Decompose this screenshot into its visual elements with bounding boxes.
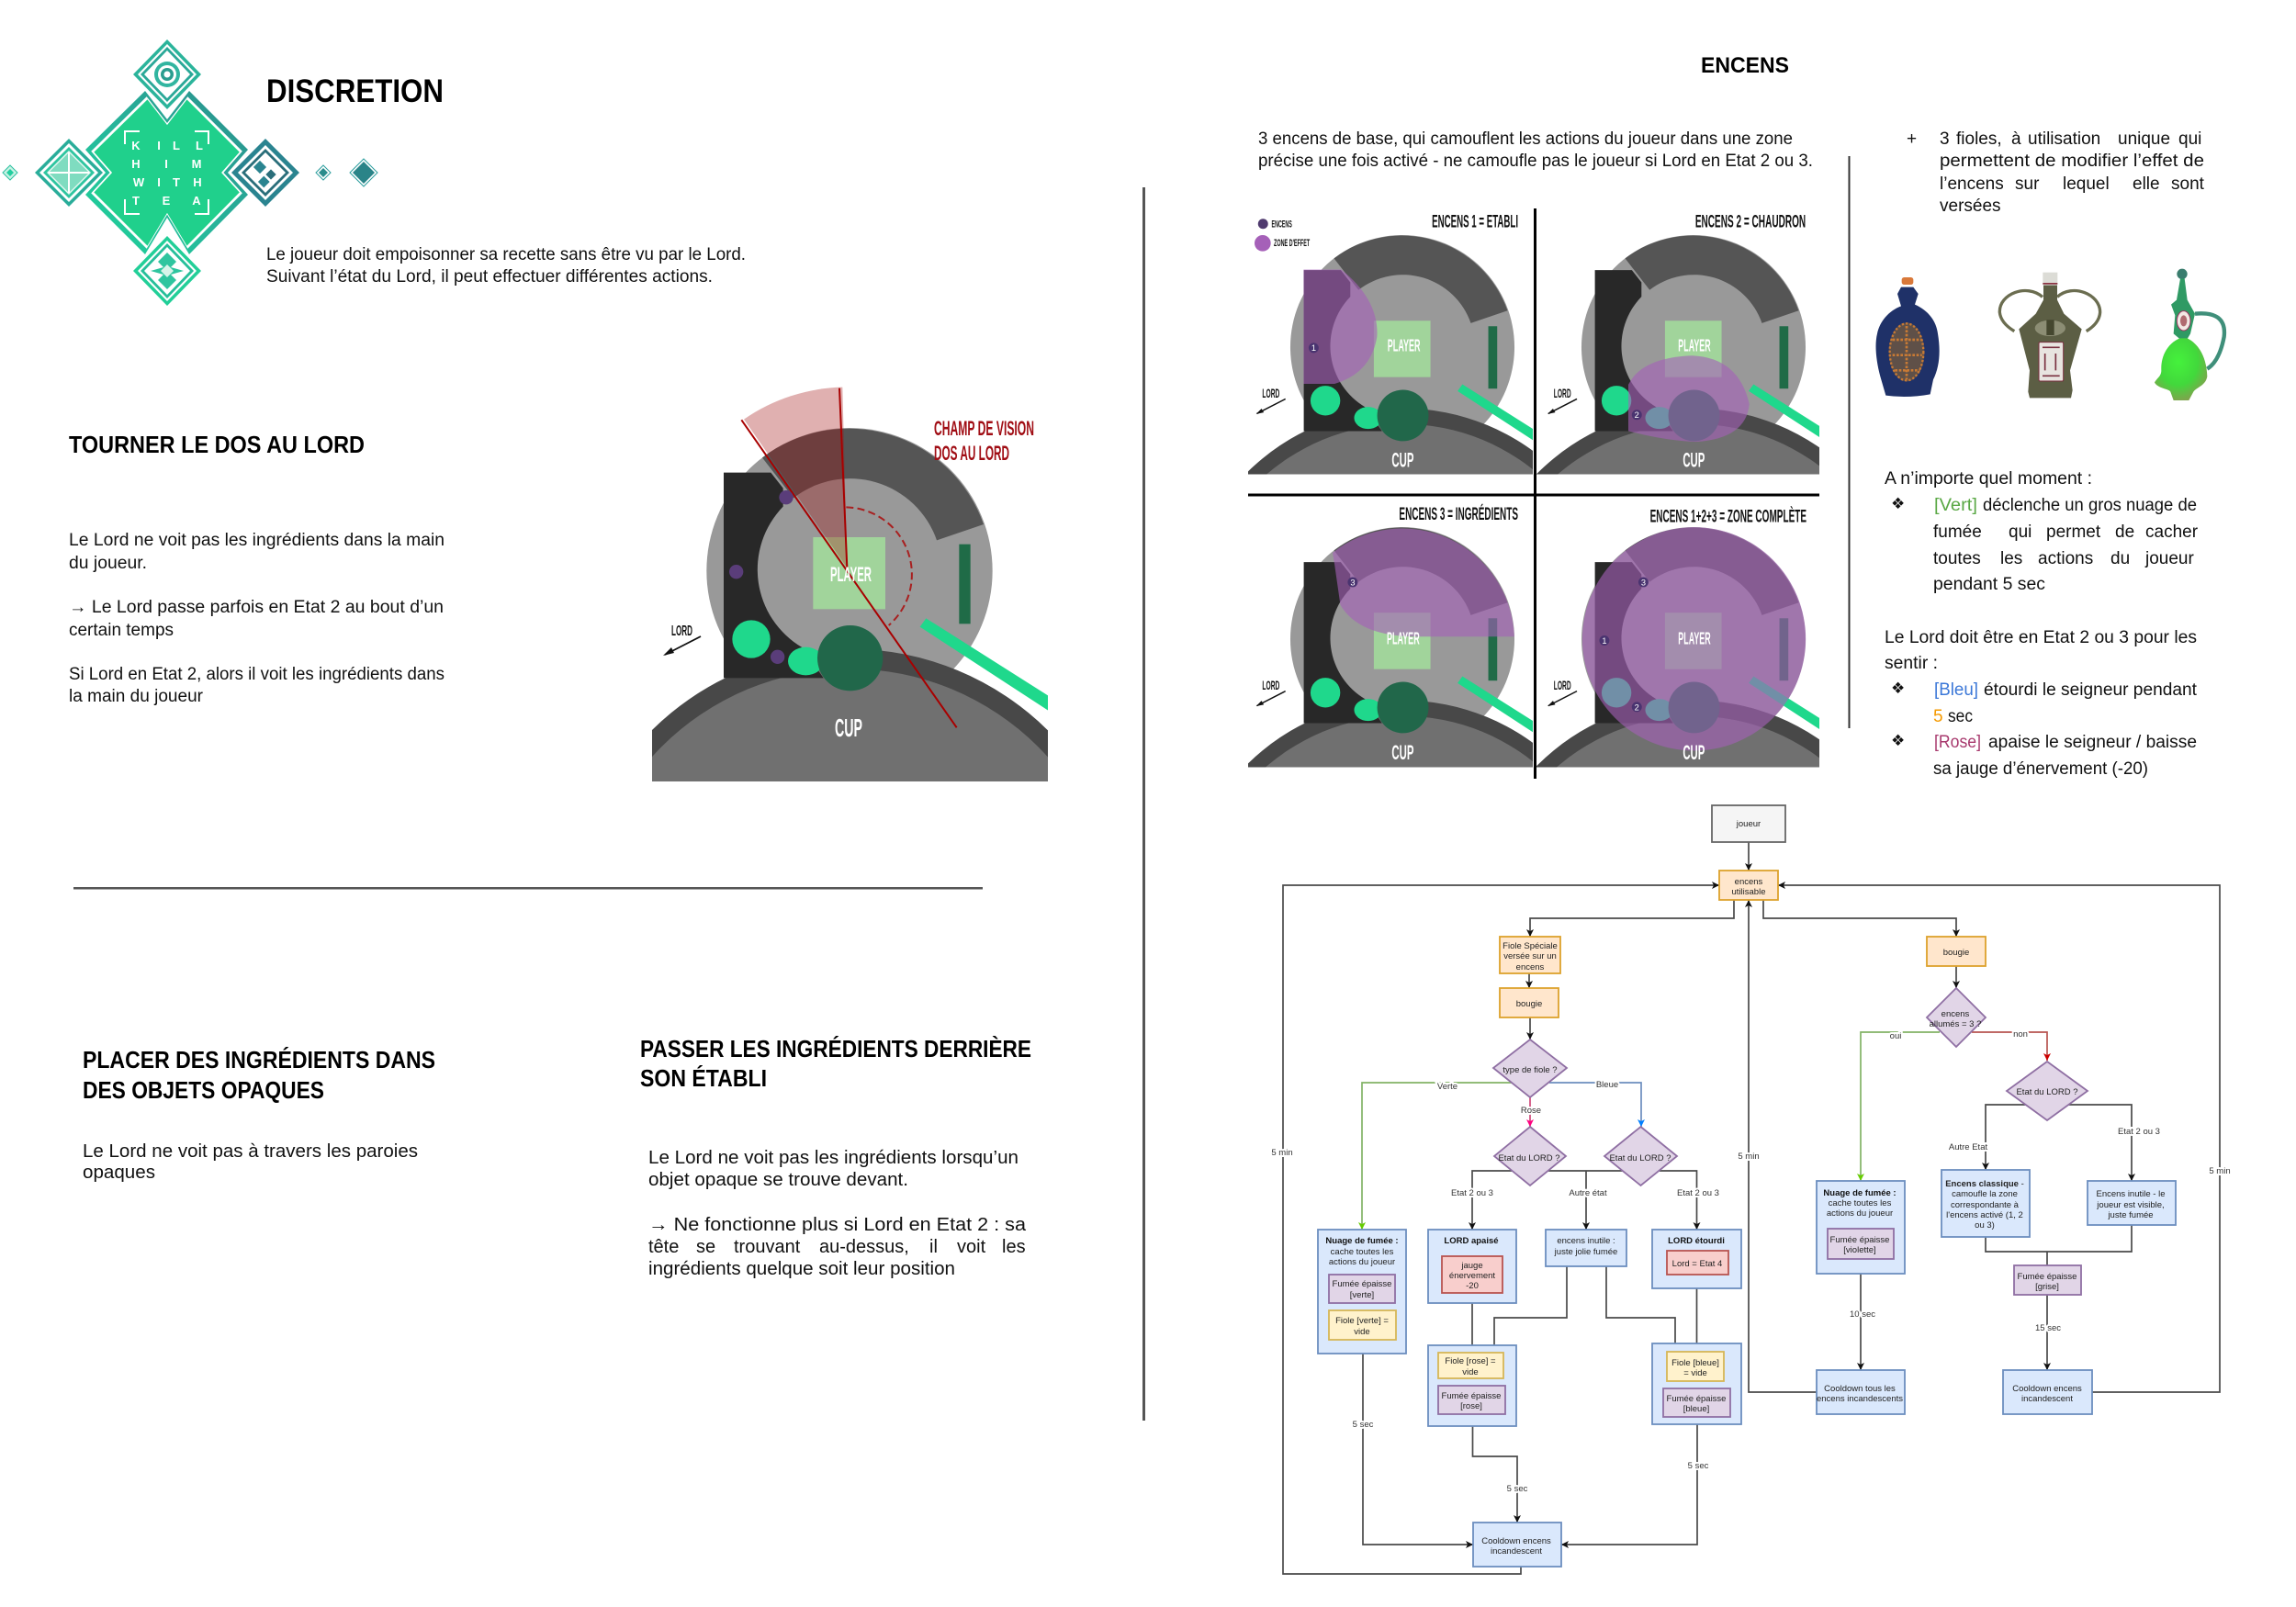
text block: fioles: unique	[2118, 129, 2170, 149]
node: encens inutile visible: Encens inutile - le	[2097, 1189, 2165, 1199]
vertical divider	[1142, 187, 1145, 1421]
node: effets rose	[1428, 1345, 1516, 1426]
text block: fioles: sont	[2171, 174, 2205, 194]
logo: right diamond	[231, 139, 299, 207]
node: encens utilisable	[1719, 871, 1778, 900]
zone overlay and labels: CUP	[1391, 741, 1413, 764]
text block: à n'importe quel moment: toutes	[1933, 549, 1981, 568]
zone overlay and labels: CUP	[1391, 449, 1413, 472]
intro text: Suivant l’état du Lord, il peut effectuer différentes actions.	[266, 267, 713, 287]
node: Lord apaisé: LORD apaisé	[1444, 1236, 1499, 1246]
text block: à n'importe quel moment: les	[2000, 549, 2022, 568]
zone overlay and labels: LORD	[1262, 387, 1279, 400]
text block: tourner le dos: Le Lord ne voit pas les ingrédients dans la main	[69, 531, 445, 550]
node: nuage de fumée violette: Nuage de fumée :	[1823, 1188, 1896, 1198]
text block: derrière l'établi: Le Lord ne voit pas les ingrédients lorsqu’un	[648, 1148, 1019, 1168]
node: cooldown gauche: Cooldown encens	[1481, 1536, 1551, 1546]
text block: état 2 ou 3: sentir :	[1885, 654, 1938, 673]
node: effets rose: Fiole [rose] =	[1445, 1356, 1496, 1366]
zone overlay and labels: PLAYER	[1387, 628, 1420, 647]
decision: type de fiole	[1493, 1039, 1567, 1097]
text block: tourner le dos: du joueur.	[69, 554, 147, 573]
text block: encens de base: précise une fois activé - ne camoufle pas le joueur si Lord en Etat 2 ou 3.	[1258, 152, 1813, 171]
flowchart edge labels: Bleue	[1596, 1080, 1618, 1090]
zone overlay and labels: ENCENS 3 = INGRÉDIENTS	[1399, 504, 1518, 524]
node: Lord apaisé: -20	[1466, 1281, 1479, 1291]
text block: derrière l'établi: voit	[957, 1237, 986, 1257]
flowchart edge labels: Autre Etat	[1949, 1142, 1987, 1152]
node: Lord étourdi	[1652, 1230, 1741, 1288]
node: encens classique: Encens classique -	[1945, 1179, 2024, 1189]
vision cone	[729, 388, 957, 727]
logo: bottom diamond	[133, 236, 201, 306]
text block: objets opaques: Le Lord ne voit pas à travers les paroies	[83, 1141, 418, 1162]
decision: état du Lord	[2007, 1062, 2088, 1120]
flowchart edge labels: Etat 2 ou 3	[2118, 1127, 2160, 1137]
flowchart edge labels: 10 sec	[1850, 1309, 1875, 1320]
intro text: Le joueur doit empoisonner sa recette sans être vu par le Lord.	[266, 245, 746, 264]
zone overlay and labels: PLAYER	[1678, 628, 1711, 647]
flowchart edge labels: oui	[1890, 1031, 1901, 1041]
node: effets rose: Fumée épaisse	[1442, 1391, 1501, 1401]
logo: central diamond: A	[192, 194, 201, 208]
zone overlay and labels: 3	[1350, 578, 1355, 587]
node: nuage de fumée violette	[1817, 1181, 1905, 1274]
decision: état du Lord: Etat du LORD ?	[2016, 1087, 2078, 1097]
node: bougie droite	[1927, 937, 1986, 966]
text block: à n'importe quel moment: qui	[2009, 523, 2032, 542]
text block: fioles: lequel	[2063, 174, 2110, 194]
heading: placer des ingrédients	[83, 1046, 435, 1104]
text block: à n'importe quel moment: actions	[2038, 549, 2093, 568]
flowchart connectors	[1283, 842, 2220, 1574]
text block: état 2 ou 3: [Rose]	[1934, 733, 1981, 752]
node: cooldown droite	[2003, 1370, 2092, 1414]
flowchart edge labels: 5 min	[2209, 1166, 2231, 1176]
node: fiole spéciale	[1500, 937, 1560, 973]
text block: derrière l'établi: tête	[648, 1237, 679, 1257]
node: nuage de fumée vert: actions du joueur	[1329, 1257, 1395, 1267]
node: bougie droite: bougie	[1943, 948, 1969, 958]
flowchart edge labels: Autre état	[1569, 1188, 1607, 1198]
node: fiole spéciale: encens	[1516, 962, 1545, 972]
text block: état 2 ou 3	[1885, 628, 2198, 779]
text block: à n'importe quel moment: joueur	[2144, 549, 2194, 568]
flowchart edge labels: Etat 2 ou 3	[1677, 1188, 1719, 1198]
node: cooldown tous: Cooldown tous les	[1824, 1384, 1896, 1394]
text block: à n'importe quel moment: du	[2110, 549, 2130, 568]
text block: tourner le dos	[69, 531, 445, 706]
zone overlay and labels	[1548, 506, 1806, 764]
text block: état 2 ou 3: Le Lord doit être en Etat 2 ou 3 pour les	[1885, 628, 2197, 647]
zone overlay and labels: PLAYER	[1388, 336, 1421, 355]
node: encens inutile visible: juste fumée	[2107, 1210, 2154, 1220]
panel: encens 1 établi	[1248, 215, 1533, 474]
decision: encens allumés: encens	[1941, 1009, 1970, 1019]
text block: état 2 ou 3: sa jauge d’énervement (-20)	[1933, 759, 2148, 779]
node: Lord apaisé: jauge	[1460, 1261, 1483, 1271]
text block: objets opaques: opaques	[83, 1163, 155, 1183]
text block: fioles: l’encens	[1940, 174, 2004, 194]
node: effets rose: [rose]	[1460, 1401, 1482, 1411]
arrow: Lord direction	[663, 624, 701, 656]
text block: état 2 ou 3: ❖	[1891, 732, 1905, 750]
flowchart edge labels: Etat 2 ou 3	[1451, 1188, 1493, 1198]
zone overlay and labels: CUP	[1683, 449, 1705, 472]
decision: état du Lord droite	[1604, 1127, 1677, 1186]
diagram: champ de vision dos au Lord	[652, 388, 1048, 781]
heading: placer des ingrédients: DES OBJETS OPAQUES	[83, 1076, 324, 1104]
node: cooldown tous: encens incandescents	[1817, 1394, 1903, 1404]
node: effets bleue: = vide	[1683, 1368, 1707, 1378]
logo: central diamond: M	[192, 157, 201, 171]
flowchart edge labels: 5 sec	[1688, 1461, 1709, 1471]
node: cooldown droite: incandescent	[2021, 1394, 2073, 1404]
logo: central diamond: H	[193, 175, 202, 189]
zone overlay and labels: ENCENS 1+2+3 = ZONE COMPLÈTE	[1650, 506, 1806, 526]
zone overlay and labels: 2	[1635, 410, 1639, 420]
icons: three flasks	[1876, 269, 2224, 400]
node: Lord apaisé	[1428, 1230, 1516, 1303]
text block: à n'importe quel moment: ❖	[1891, 495, 1905, 513]
node: cooldown gauche	[1473, 1523, 1561, 1567]
node: fumée grise	[2014, 1265, 2081, 1295]
logo: tiny diamonds	[3, 159, 377, 186]
label: champ de vision: DOS AU LORD	[934, 442, 1009, 465]
node: encens classique: l'encens activé (1, 2	[1946, 1210, 2023, 1220]
flowchart edge labels: Verte	[1437, 1082, 1458, 1092]
text block: objets opaques	[83, 1141, 418, 1183]
text block: fioles	[1907, 129, 2205, 216]
node: nuage de fumée vert: Fiole [verte] =	[1335, 1316, 1389, 1326]
node: Lord étourdi: Lord = Etat 4	[1672, 1259, 1722, 1269]
logo: central diamond: K	[131, 139, 141, 152]
text block: fioles: permettent de modifier l’effet de	[1940, 152, 2204, 171]
logo: central diamond: T	[132, 194, 140, 208]
text block: fioles: elle	[2133, 174, 2160, 194]
node: fumée grise: [grise]	[2035, 1282, 2059, 1292]
zone overlay and labels: LORD	[1554, 679, 1571, 692]
label: player: PLAYER	[830, 563, 872, 586]
icon: green flask	[2155, 269, 2224, 400]
zone overlay and labels: 2	[1635, 702, 1639, 712]
logo: central diamond	[85, 91, 248, 254]
decision: état du Lord gauche	[1494, 1127, 1566, 1186]
text block: à n'importe quel moment: fumée	[1933, 523, 1982, 542]
node: encens classique: correspondante à	[1951, 1200, 2020, 1210]
node: nuage de fumée vert: [verte]	[1350, 1290, 1374, 1300]
text block: fioles: +	[1907, 129, 1917, 149]
node: effets bleue: Fumée épaisse	[1667, 1394, 1726, 1404]
zone overlay and labels: ZONE D'EFFET	[1274, 238, 1310, 249]
text block: état 2 ou 3: [Bleu]	[1934, 680, 1978, 700]
heading: passer derrière l'établi: SON ÉTABLI	[640, 1064, 767, 1092]
flowchart edge labels: Rose	[1521, 1106, 1541, 1116]
node: fumée grise: Fumée épaisse	[2018, 1272, 2077, 1282]
floor plan	[652, 428, 1048, 781]
zone overlay and labels	[1256, 504, 1518, 764]
panel: encens 1+2+3 zone complète	[1536, 506, 1819, 768]
text block: fioles: qui	[2178, 129, 2201, 149]
intro text	[266, 245, 746, 287]
vertical separator	[1848, 156, 1850, 728]
text block: à n'importe quel moment: [Vert]	[1934, 496, 1977, 515]
text block: à n'importe quel moment: de	[2115, 523, 2134, 542]
node: encens classique: ou 3)	[1975, 1220, 1995, 1231]
text block: fioles: utilisation	[2028, 129, 2100, 149]
text block: tourner le dos: la main du joueur	[69, 687, 204, 706]
heading: tourner le dos au Lord: TOURNER LE DOS AU LORD	[69, 431, 365, 458]
zone overlay and labels: ENCENS	[1272, 219, 1292, 230]
node: effets bleue: Fiole [bleue]	[1671, 1358, 1719, 1368]
text block: fioles: sur	[2015, 174, 2040, 194]
heading: placer des ingrédients: PLACER DES INGRÉDIENTS DANS	[83, 1046, 435, 1073]
decision: type de fiole: type de fiole ?	[1503, 1065, 1558, 1075]
node: encens classique	[1941, 1170, 2030, 1237]
label: cup: CUP	[835, 714, 862, 742]
heading: passer derrière l'établi	[640, 1035, 1031, 1092]
flowchart edge labels: 5 sec	[1507, 1484, 1528, 1494]
text block: derrière l'établi: il	[929, 1237, 938, 1257]
logo: central diamond: I	[157, 175, 161, 189]
node: bougie gauche: bougie	[1516, 999, 1542, 1009]
logo: Kill Him With Tea	[3, 39, 377, 306]
text block: tourner le dos: certain temps	[69, 621, 174, 640]
text block: tourner le dos: → Le Lord passe parfois en Etat 2 au bout d’un	[69, 598, 444, 617]
node: cooldown tous	[1817, 1370, 1905, 1414]
logo: central diamond: I	[164, 157, 168, 171]
zone overlay and labels: LORD	[1262, 679, 1279, 692]
logo: central diamond: T	[173, 175, 180, 189]
decision: encens allumés	[1927, 988, 1986, 1047]
title: encens: ENCENS	[1701, 53, 1789, 78]
node: encens inutile: encens inutile :	[1557, 1236, 1615, 1246]
text block: à n'importe quel moment: pendant 5 sec	[1933, 575, 2045, 594]
decision: état du Lord droite: Etat du LORD ?	[1609, 1153, 1671, 1163]
icon: olive flask	[1999, 273, 2100, 398]
zone overlay and labels: ENCENS 2 = CHAUDRON	[1695, 213, 1806, 232]
node: nuage de fumée vert	[1318, 1230, 1406, 1354]
node: nuage de fumée vert: vide	[1354, 1327, 1370, 1337]
label: champ de vision	[934, 417, 1034, 465]
text block: à n'importe quel moment	[1885, 469, 2199, 594]
divider	[73, 887, 983, 889]
node: nuage de fumée violette: [violette]	[1843, 1245, 1876, 1255]
text block: à n'importe quel moment: cacher	[2145, 523, 2199, 542]
node: encens inutile visible: joueur est visible,	[2096, 1200, 2165, 1210]
node: fiole spéciale: versée sur un	[1503, 951, 1557, 961]
zone overlay and labels: ENCENS 1 = ETABLI	[1432, 213, 1518, 232]
node: nuage de fumée vert: Nuage de fumée :	[1325, 1236, 1399, 1246]
text block: encens de base	[1258, 129, 1813, 171]
node: Lord apaisé: énervement	[1449, 1271, 1495, 1281]
text block: à n'importe quel moment: permet	[2046, 523, 2101, 542]
text block: tourner le dos: Si Lord en Etat 2, alors il voit les ingrédients dans	[69, 665, 445, 684]
node: fiole spéciale: Fiole Spéciale	[1503, 941, 1558, 951]
text block: derrière l'établi	[648, 1148, 1027, 1279]
logo: central diamond: I	[157, 139, 161, 152]
text block: derrière l'établi: → Ne fonctionne plus si Lord en Etat 2 : sa	[648, 1215, 1027, 1235]
node: nuage de fumée vert: cache toutes les	[1331, 1247, 1394, 1257]
text block: fioles: fioles,	[1956, 129, 2002, 149]
flowchart edge labels: 5 min	[1271, 1148, 1293, 1158]
node: encens inutile visible	[2088, 1181, 2176, 1225]
flowchart: encens	[1271, 805, 2231, 1574]
zone overlay and labels	[1548, 213, 1806, 472]
logo: top diamond	[133, 39, 201, 109]
panel dividers	[1248, 208, 1819, 779]
text block: derrière l'établi: ingrédients quelque soit leur position	[648, 1259, 955, 1279]
node: nuage de fumée violette: cache toutes les	[1829, 1198, 1892, 1208]
text block: fioles: 3	[1940, 129, 1950, 149]
logo: central diamond: L	[173, 139, 180, 152]
node: joueur: joueur	[1736, 819, 1761, 829]
node: encens utilisable: encens	[1735, 877, 1763, 887]
text block: encens de base: 3 encens de base, qui camouflent les actions du joueur dans une zone	[1258, 129, 1793, 149]
text block: derrière l'établi: objet opaque se trouve devant.	[648, 1170, 908, 1190]
text block: derrière l'établi: trouvant	[734, 1237, 801, 1257]
node: joueur	[1712, 805, 1785, 842]
flowchart edge labels: 5 min	[1738, 1152, 1760, 1162]
flowchart edge labels: 5 sec	[1353, 1420, 1374, 1430]
zone overlay and labels: LORD	[1554, 387, 1571, 400]
node: encens inutile	[1546, 1230, 1626, 1266]
label: champ de vision: CHAMP DE VISION	[934, 417, 1034, 440]
logo: central diamond: E	[163, 194, 171, 208]
text block: derrière l'établi: se	[696, 1237, 715, 1257]
node: nuage de fumée violette: Fumée épaisse	[1830, 1235, 1889, 1245]
logo: central diamond: H	[131, 157, 141, 171]
arrow: Lord direction: LORD	[671, 624, 692, 639]
node: nuage de fumée violette: actions du joueur	[1827, 1208, 1893, 1219]
logo: central diamond: L	[196, 139, 203, 152]
text block: état 2 ou 3: ❖	[1891, 680, 1905, 698]
node: cooldown droite: Cooldown encens	[2012, 1384, 2082, 1394]
text block: à n'importe quel moment: déclenche un gros nuage de	[1983, 496, 2197, 515]
zone overlay and labels: 1	[1311, 343, 1316, 353]
node: Lord étourdi: LORD étourdi	[1668, 1236, 1725, 1246]
node: effets bleue	[1652, 1343, 1741, 1424]
node: encens classique: camoufle la zone	[1952, 1189, 2018, 1199]
logo: left diamond	[35, 139, 103, 207]
text block: derrière l'établi: au-dessus,	[819, 1237, 909, 1257]
icon: blue flask	[1876, 277, 1940, 397]
text block: derrière l'établi: les	[1002, 1237, 1026, 1257]
node: bougie gauche	[1500, 988, 1559, 1017]
node: encens utilisable: utilisable	[1732, 887, 1765, 897]
text block: état 2 ou 3: apaise le seigneur / baisse	[1988, 733, 2197, 752]
zone overlay and labels	[1255, 213, 1518, 472]
title: Discretion: DISCRETION	[266, 73, 444, 109]
decision: état du Lord gauche: Etat du LORD ?	[1498, 1153, 1560, 1163]
node: effets rose: vide	[1462, 1367, 1479, 1377]
text block: fioles: versées	[1940, 197, 2001, 216]
flowchart edge labels: 15 sec	[2035, 1323, 2061, 1333]
flowchart edge labels	[1271, 1029, 2231, 1494]
zone overlay and labels: 3	[1641, 578, 1646, 587]
text block: état 2 ou 3: sec	[1948, 707, 1973, 726]
text block: fioles: à	[2011, 129, 2021, 149]
zone overlay and labels: 1	[1602, 636, 1606, 646]
panel: encens 2 chaudron	[1536, 215, 1819, 474]
zone overlay and labels: PLAYER	[1678, 336, 1711, 355]
node: nuage de fumée vert: Fumée épaisse	[1333, 1279, 1391, 1289]
panel: encens 3 ingrédients	[1248, 503, 1533, 768]
zone overlay and labels: CUP	[1683, 741, 1705, 764]
text block: état 2 ou 3: 5	[1933, 707, 1943, 726]
decision: encens allumés: allumés = 3 ?	[1930, 1019, 1981, 1029]
node: encens inutile: juste jolie fumée	[1554, 1247, 1617, 1257]
text block: état 2 ou 3: étourdi le seigneur pendant	[1984, 680, 2198, 700]
heading: passer derrière l'établi: PASSER LES INGRÉDIENTS DERRIÈRE	[640, 1035, 1031, 1062]
logo: central diamond: W	[133, 175, 145, 189]
text block: à n'importe quel moment: A n’importe quel moment :	[1885, 469, 2092, 489]
flowchart edge labels: non	[2013, 1029, 2028, 1039]
node: effets bleue: [bleue]	[1683, 1404, 1709, 1414]
node: cooldown gauche: incandescent	[1491, 1546, 1542, 1556]
